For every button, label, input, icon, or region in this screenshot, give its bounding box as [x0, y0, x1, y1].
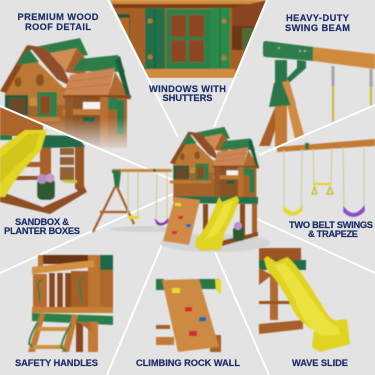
center slide [195, 196, 239, 251]
deck wall [0, 106, 43, 136]
panel: safety handles [28, 255, 113, 352]
trapeze [312, 183, 333, 194]
swing top beam [277, 139, 375, 152]
ropes [284, 146, 364, 208]
wall [162, 279, 219, 352]
panel: sandbox and planter boxes [0, 106, 87, 214]
heading: heavy-duty swing beam: SWING BEAM [285, 23, 350, 33]
center house [170, 127, 259, 202]
heading: safety handles: SAFETY HANDLES [15, 358, 98, 368]
beam wood [313, 47, 375, 69]
tower legs [12, 147, 84, 191]
sandbox [0, 180, 87, 214]
heading: two belt swings and trapeze: & TRAPEZE [308, 229, 358, 239]
deck and legs [175, 196, 258, 236]
panel: climbing rock wall [156, 279, 221, 352]
green bracket [269, 60, 306, 107]
swing chain right [370, 69, 372, 106]
heading: windows with shutters: WINDOWS WITH [149, 84, 226, 94]
panel: windows with shutters [108, 0, 268, 78]
green deck band [32, 313, 113, 325]
heading: sandbox and planter boxes: PLANTER BOXES [4, 226, 80, 236]
heading: two belt swings and trapeze: TWO BELT SWINGS [289, 220, 373, 230]
heading: sandbox and planter boxes: SANDBOX & [15, 217, 69, 227]
heading: wave slide: WAVE SLIDE [292, 358, 348, 368]
swing chain left [332, 66, 334, 122]
center sandbox [220, 232, 258, 246]
purple swing seat [344, 207, 364, 216]
a-frame legs [258, 104, 304, 147]
heading: climbing rock wall: CLIMBING ROCK WALL [136, 358, 240, 368]
wave slide [0, 130, 47, 197]
flowers [37, 174, 55, 200]
green safety handles [29, 277, 83, 351]
green deck band [40, 135, 85, 148]
ladder [28, 314, 78, 352]
panel: two belt swings and trapeze [277, 139, 375, 216]
bolts [278, 47, 306, 52]
railing and slats [33, 271, 89, 307]
slide body [264, 256, 350, 352]
center playset [93, 127, 270, 252]
heading: premium wood roof detail: PREMIUM WOOD [18, 12, 99, 22]
heading: premium wood roof detail: ROOF DETAIL [25, 22, 91, 32]
panel: wave slide [259, 248, 350, 352]
panel: premium wood roof detail [0, 37, 132, 148]
center rock wall [163, 197, 200, 245]
beam green cap [263, 41, 313, 61]
center flowers [233, 222, 244, 241]
center swing set [93, 169, 181, 232]
under supports [76, 322, 98, 352]
heading: heavy-duty swing beam: HEAVY-DUTY [286, 13, 350, 23]
ground shadow [160, 234, 270, 252]
heading: windows with shutters: SHUTTERS [162, 93, 212, 103]
panel: heavy-duty swing beam [259, 41, 375, 147]
holds [172, 288, 206, 336]
yellow swing seat [284, 207, 302, 215]
